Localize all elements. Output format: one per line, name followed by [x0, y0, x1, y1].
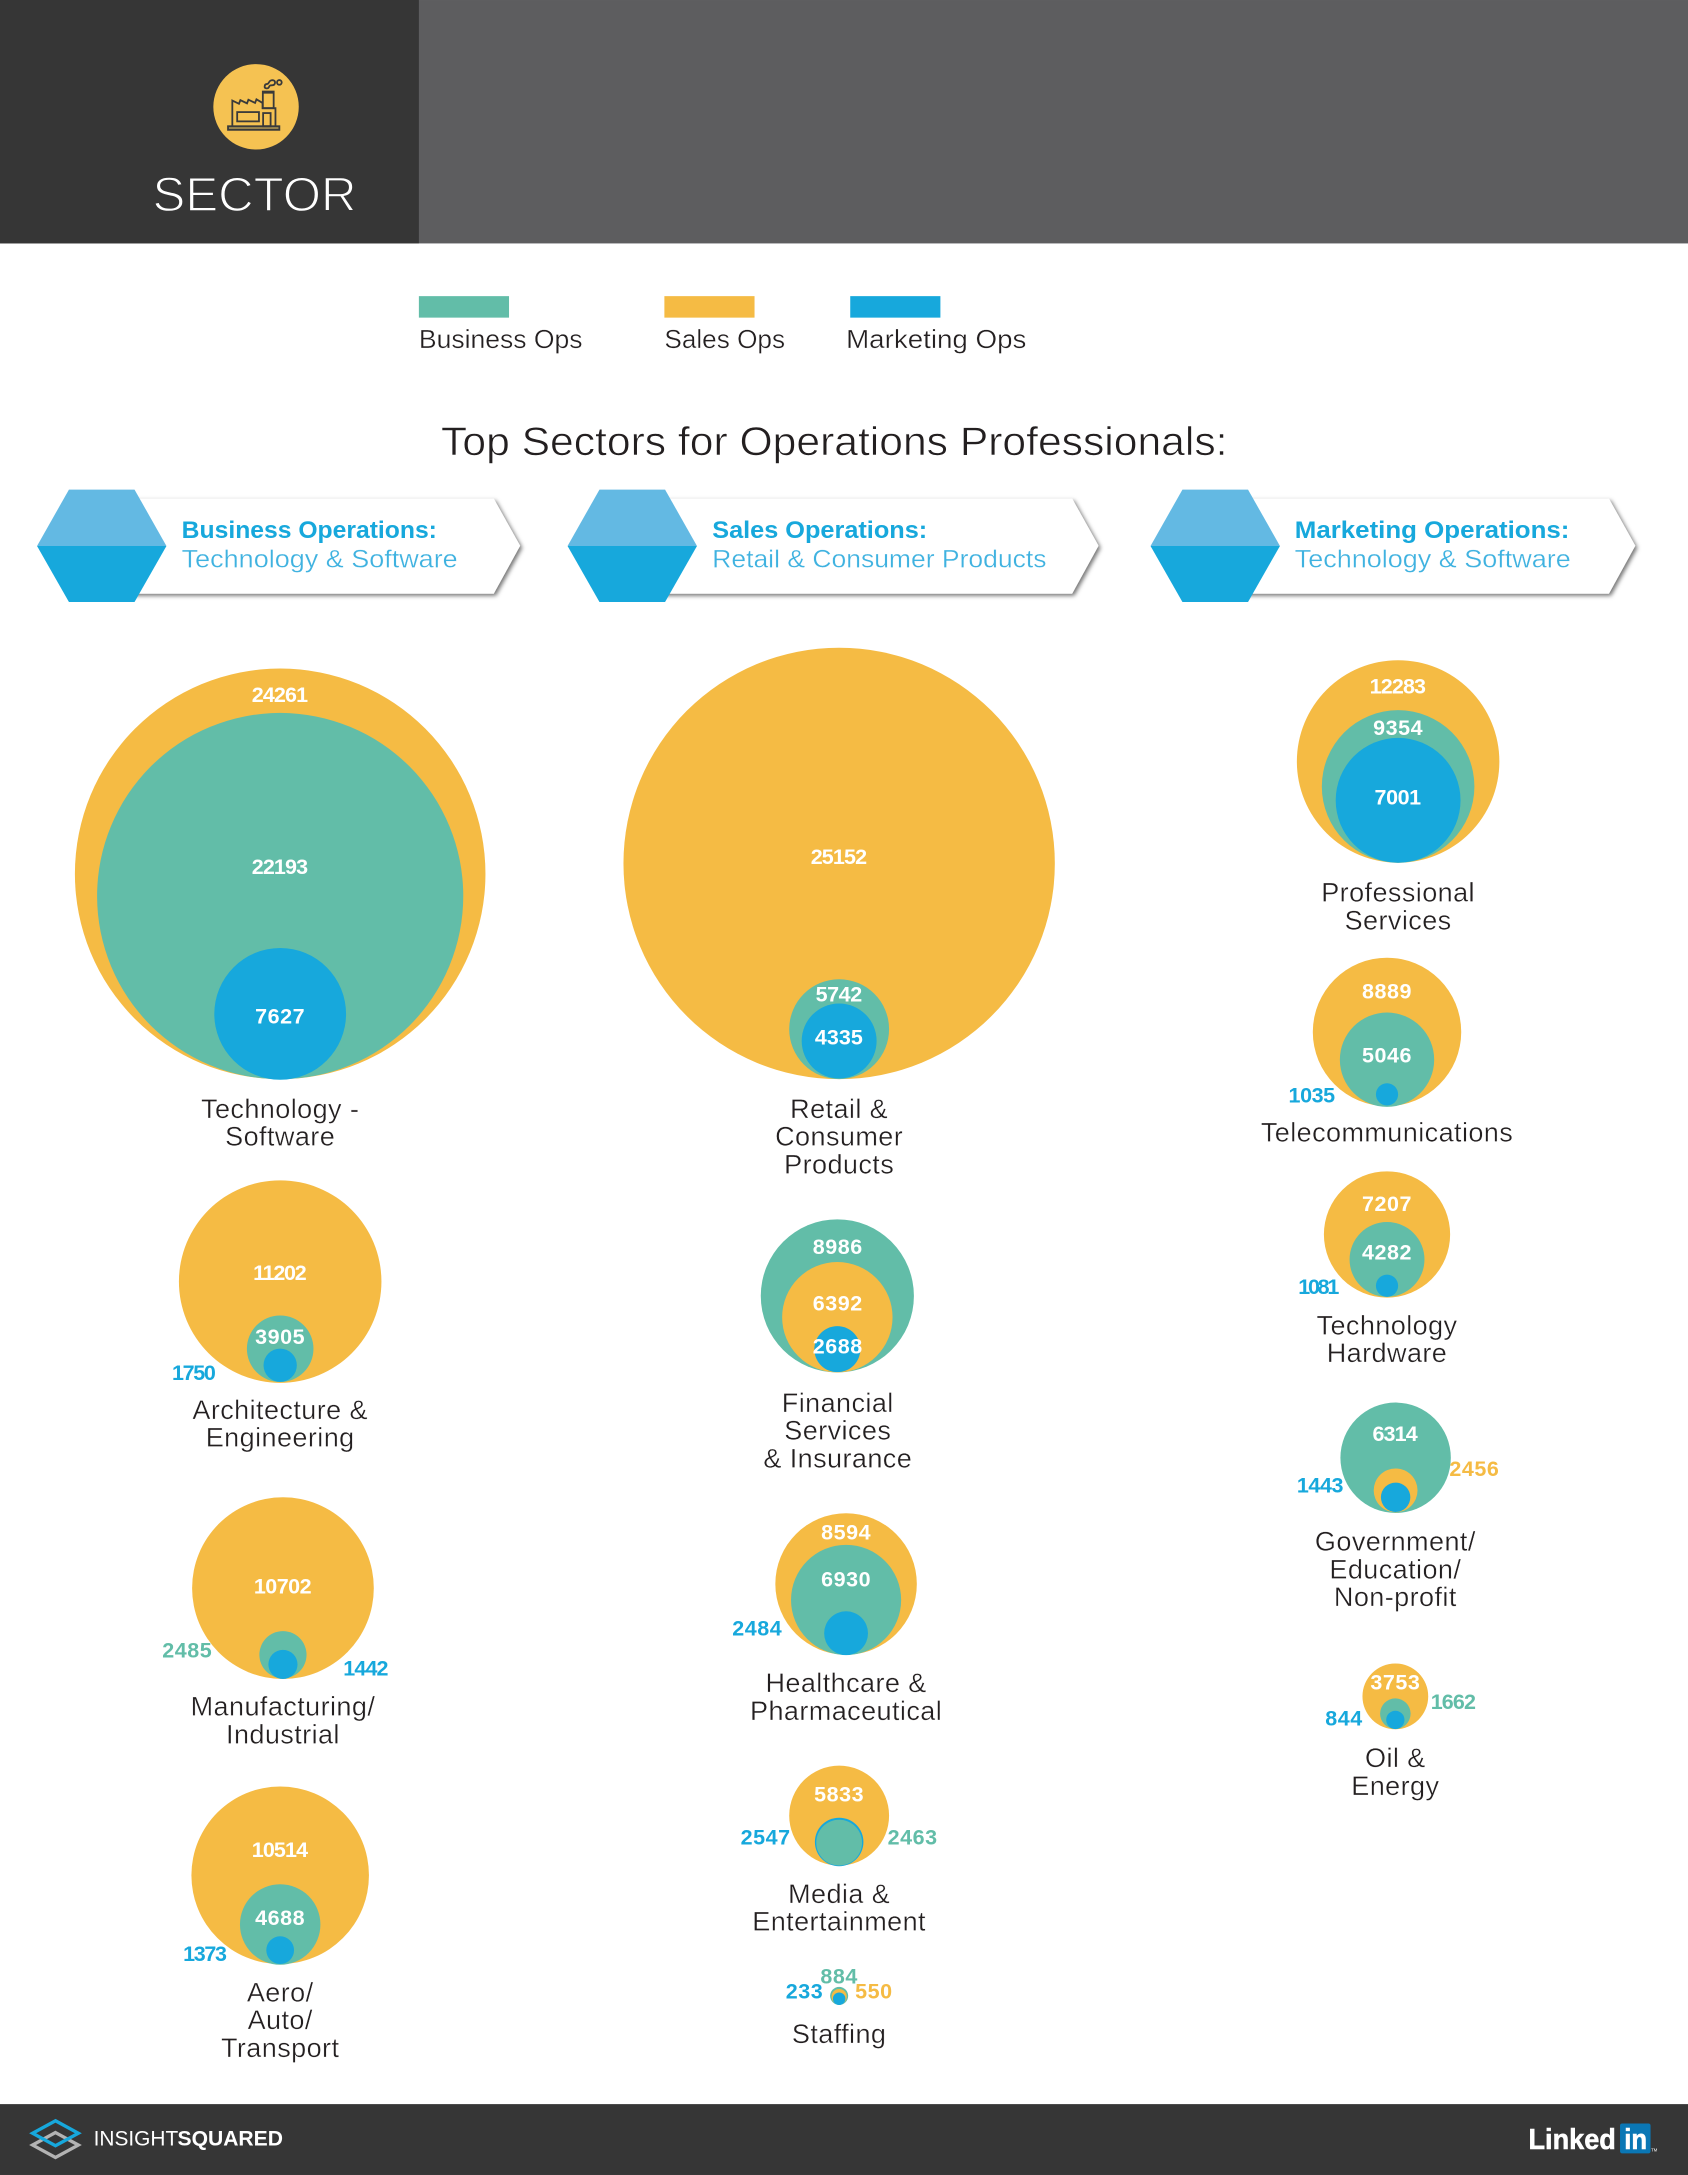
legend — [419, 296, 1026, 354]
bubble: retail and consumer products — [623, 648, 1055, 1179]
legend: Sales Ops — [664, 326, 785, 354]
logo: linkedin: Linked — [1528, 2124, 1616, 2156]
logo: insightsquared: INSIGHT — [94, 2128, 179, 2151]
bubble: manufacturing industrial: 1442 — [343, 1657, 389, 1681]
bubble: healthcare and pharmaceutical: 8594 — [821, 1521, 871, 1545]
bubble: media and entertainment: Media & — [788, 1879, 890, 1909]
bubble: oil and energy — [1325, 1663, 1476, 1801]
bubble: staffing: 884 — [820, 1964, 858, 1988]
bubble: financial services and insurance: 8986 — [813, 1235, 863, 1259]
bubble: media and entertainment: 2547 — [741, 1826, 791, 1850]
bubble: manufacturing industrial: 10702 — [254, 1575, 312, 1599]
header band — [0, 0, 1688, 243]
bubble: staffing — [786, 1964, 893, 2049]
bubble: aero auto transport: Aero/ — [247, 1977, 314, 2007]
bubble: technology software: 7627 — [255, 1005, 305, 1029]
bubble: oil and energy: 3753 — [1370, 1670, 1420, 1694]
bubble: media and entertainment: 2463 — [888, 1826, 938, 1850]
bubble: staffing: Staffing — [792, 2019, 886, 2049]
bubble: telecommunications: 1035 — [1289, 1084, 1336, 1108]
bubble: architecture and engineering — [172, 1180, 381, 1453]
bubble: aero auto transport: 1373 — [183, 1942, 227, 1966]
footer band — [0, 2104, 1688, 2175]
bubble: healthcare and pharmaceutical: Healthcare & — [765, 1668, 927, 1698]
bubble: manufacturing industrial: Manufacturing/ — [191, 1692, 375, 1722]
bubble: media and entertainment: 5833 — [814, 1783, 864, 1807]
bubble: oil and energy: Energy — [1351, 1771, 1439, 1801]
bubble: professional services — [1297, 660, 1499, 935]
logo: linkedin: TM — [1651, 2147, 1658, 2152]
legend: Business Ops — [419, 326, 583, 354]
bubble: media and entertainment: Entertainment — [752, 1907, 926, 1937]
bubble: healthcare and pharmaceutical: 6930 — [821, 1568, 871, 1592]
bubble: financial services and insurance: 6392 — [813, 1292, 863, 1316]
bubble: government education non-profit: 1443 — [1297, 1473, 1344, 1497]
bubble: technology software: Technology - — [201, 1094, 359, 1124]
bubble: technology hardware: Technology — [1317, 1310, 1458, 1340]
bubble: architecture and engineering: Architecture & — [192, 1395, 368, 1425]
bubble: healthcare and pharmaceutical: Pharmaceutical — [750, 1696, 942, 1726]
bubble: staffing: 233 — [786, 1980, 823, 2004]
bubble: telecommunications — [1261, 958, 1513, 1148]
banner: sales operations: Retail & Consumer Products — [712, 545, 1047, 573]
banner: business operations: Business Operations: — [182, 517, 437, 544]
bubble: aero auto transport: 10514 — [252, 1838, 309, 1862]
logo: insightsquared — [33, 2121, 283, 2158]
bubble: architecture and engineering: Engineering — [206, 1423, 355, 1453]
bubble: financial services and insurance: Financial — [782, 1388, 894, 1418]
bubble: technology hardware — [1298, 1171, 1458, 1368]
bubble: aero auto transport — [183, 1786, 369, 2063]
bubble: oil and energy: 844 — [1325, 1706, 1363, 1730]
bubble: manufacturing industrial: Industrial — [226, 1719, 340, 1749]
bubble: manufacturing industrial: 2485 — [162, 1638, 212, 1662]
bubble: oil and energy: Oil & — [1365, 1743, 1426, 1773]
bubble: professional services: Professional — [1321, 878, 1475, 908]
bubble: healthcare and pharmaceutical — [732, 1513, 942, 1726]
bubble: technology software: 22193 — [252, 855, 309, 879]
bubble: retail and consumer products: Retail & — [790, 1094, 888, 1124]
banner: marketing operations — [1151, 490, 1635, 602]
bubble: professional services: 12283 — [1370, 675, 1427, 699]
bubble: technology software: Software — [225, 1122, 335, 1152]
bubble: professional services: 9354 — [1373, 716, 1423, 740]
bubble: architecture and engineering: 1750 — [172, 1361, 216, 1385]
bubble: government education non-profit — [1297, 1403, 1499, 1612]
bubble: financial services and insurance: & Insurance — [763, 1443, 912, 1473]
bubble: government education non-profit: 2456 — [1449, 1457, 1499, 1481]
banner: business operations: Technology & Software — [182, 545, 458, 573]
bubble: government education non-profit: Education/ — [1329, 1554, 1461, 1584]
banner: sales operations: Sales Operations: — [712, 517, 927, 544]
bubble: technology software — [75, 669, 485, 1152]
bubble: retail and consumer products: 25152 — [811, 845, 868, 869]
bubble: telecommunications: Telecommunications — [1261, 1118, 1513, 1148]
legend: Marketing Ops — [846, 326, 1026, 354]
bubble: telecommunications: 5046 — [1362, 1043, 1412, 1067]
icon: factory — [213, 64, 299, 150]
banner: sales operations — [568, 490, 1099, 602]
logo: linkedin: in — [1624, 2124, 1647, 2156]
bubble: financial services and insurance: Services — [784, 1416, 891, 1446]
bubble: aero auto transport: 4688 — [255, 1906, 305, 1930]
bubble: aero auto transport: Transport — [221, 2033, 339, 2063]
section title: sector: SECTOR — [153, 168, 356, 222]
bubble: government education non-profit: Non-profit — [1334, 1582, 1457, 1612]
banner: business operations — [37, 490, 520, 602]
bubble: technology hardware: Hardware — [1327, 1338, 1447, 1368]
bubble: staffing: 550 — [855, 1980, 893, 2004]
bubble: retail and consumer products: 5742 — [816, 982, 863, 1006]
bubble: professional services: 7001 — [1375, 785, 1422, 809]
bubble: retail and consumer products: Products — [784, 1149, 894, 1179]
bubble: financial services and insurance — [761, 1219, 914, 1473]
bubble: retail and consumer products: Consumer — [775, 1122, 903, 1152]
bubble: architecture and engineering: 3905 — [255, 1325, 305, 1349]
banner: marketing operations: Technology & Software — [1295, 545, 1571, 573]
bubble: technology hardware: 4282 — [1362, 1240, 1412, 1264]
bubble: professional services: Services — [1345, 905, 1452, 935]
bubble: aero auto transport: Auto/ — [248, 2005, 313, 2035]
bubble: government education non-profit: Government/ — [1315, 1527, 1476, 1557]
bubble: government education non-profit: 6314 — [1372, 1422, 1418, 1446]
main heading: Top Sectors for Operations Professionals: — [441, 419, 1228, 464]
bubble: retail and consumer products: 4335 — [815, 1025, 863, 1049]
bubble: manufacturing industrial — [162, 1497, 389, 1749]
bubble: financial services and insurance: 2688 — [813, 1335, 863, 1359]
bubble: oil and energy: 1662 — [1431, 1690, 1476, 1714]
bubble: telecommunications: 8889 — [1362, 980, 1412, 1004]
bubble: technology hardware: 7207 — [1362, 1192, 1412, 1216]
logo: insightsquared: SQUARED — [178, 2128, 283, 2151]
bubble: architecture and engineering: 11202 — [253, 1261, 307, 1285]
bubble: healthcare and pharmaceutical: 2484 — [732, 1616, 782, 1640]
bubble: technology hardware: 1081 — [1298, 1275, 1340, 1299]
banner: marketing operations: Marketing Operations: — [1295, 517, 1569, 544]
bubble: media and entertainment — [741, 1766, 938, 1937]
bubble: technology software: 24261 — [252, 683, 309, 707]
